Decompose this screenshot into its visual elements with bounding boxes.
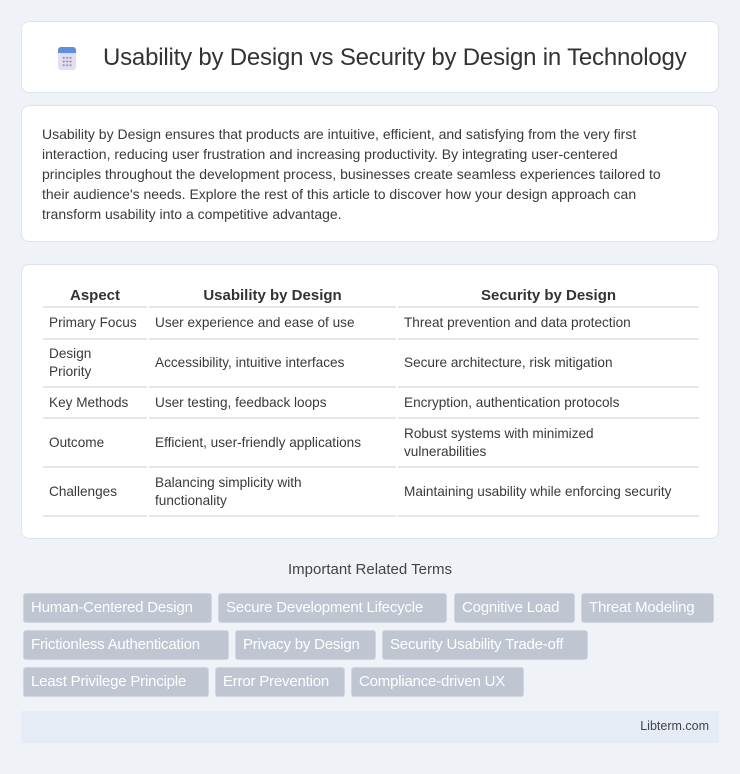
header card	[21, 21, 719, 93]
comparison table: functionality	[155, 492, 227, 508]
related terms tags: Least Privilege Principle	[31, 673, 186, 690]
related terms tags: Compliance-driven UX	[359, 673, 505, 690]
comparison table: Robust systems with minimized	[404, 426, 594, 440]
intro text card: Usability by Design ensures that products are intuitive, efficient, and satisfying from the very first	[42, 126, 636, 142]
comparison table: Secure architecture, risk mitigation	[404, 355, 613, 370]
footer: Libterm.com	[640, 719, 709, 733]
comparison table: Priority	[49, 364, 91, 379]
icon: calendar	[58, 47, 76, 70]
comparison table: Challenges	[49, 484, 117, 498]
intro text card: their audience's needs. Explore the rest of this article to discover how your design approach can	[42, 186, 636, 202]
comparison table: Balancing simplicity with	[155, 474, 302, 490]
intro text card: principles throughout the development process, businesses create seamless experiences tailored to	[42, 166, 661, 182]
intro text card	[21, 105, 719, 242]
related terms tags: Frictionless Authentication	[31, 636, 200, 653]
comparison table: User testing, feedback loops	[155, 394, 327, 410]
related terms tags: Cognitive Load	[462, 599, 559, 616]
comparison table: Accessibility, intuitive interfaces	[155, 355, 344, 370]
comparison table: Usability by Design	[203, 287, 342, 304]
related terms tags: Human-Centered Design	[31, 599, 193, 616]
comparison table: vulnerabilities	[404, 444, 486, 458]
comparison table card	[21, 264, 719, 539]
related terms heading: Important Related Terms	[288, 561, 452, 578]
comparison table: Design	[49, 346, 91, 361]
comparison table: Maintaining usability while enforcing security	[404, 484, 671, 498]
related terms tags: Secure Development Lifecycle	[226, 599, 423, 616]
title: Usability by Design vs Security by Design in Technology	[103, 44, 687, 71]
comparison table: Security by Design	[481, 287, 616, 304]
comparison table	[43, 287, 699, 517]
related terms tags: Security Usability Trade-off	[390, 636, 563, 653]
comparison table: Key Methods	[49, 394, 128, 410]
related terms tags: Privacy by Design	[243, 636, 360, 653]
intro text card: transform usability into a competitive advantage.	[42, 206, 342, 222]
intro text card: interaction, reducing user frustration and increasing productivity. By integrating user-centered	[42, 146, 618, 162]
comparison table: Primary Focus	[49, 315, 137, 330]
comparison table: Efficient, user-friendly applications	[155, 434, 361, 450]
comparison table: User experience and ease of use	[155, 315, 354, 330]
related terms tags: Error Prevention	[223, 673, 329, 690]
comparison table: Threat prevention and data protection	[404, 315, 631, 330]
comparison table: Outcome	[49, 434, 104, 450]
related terms tags: Threat Modeling	[589, 599, 694, 616]
comparison table: Encryption, authentication protocols	[404, 394, 619, 410]
footer	[21, 711, 719, 743]
comparison table: Aspect	[70, 287, 120, 304]
